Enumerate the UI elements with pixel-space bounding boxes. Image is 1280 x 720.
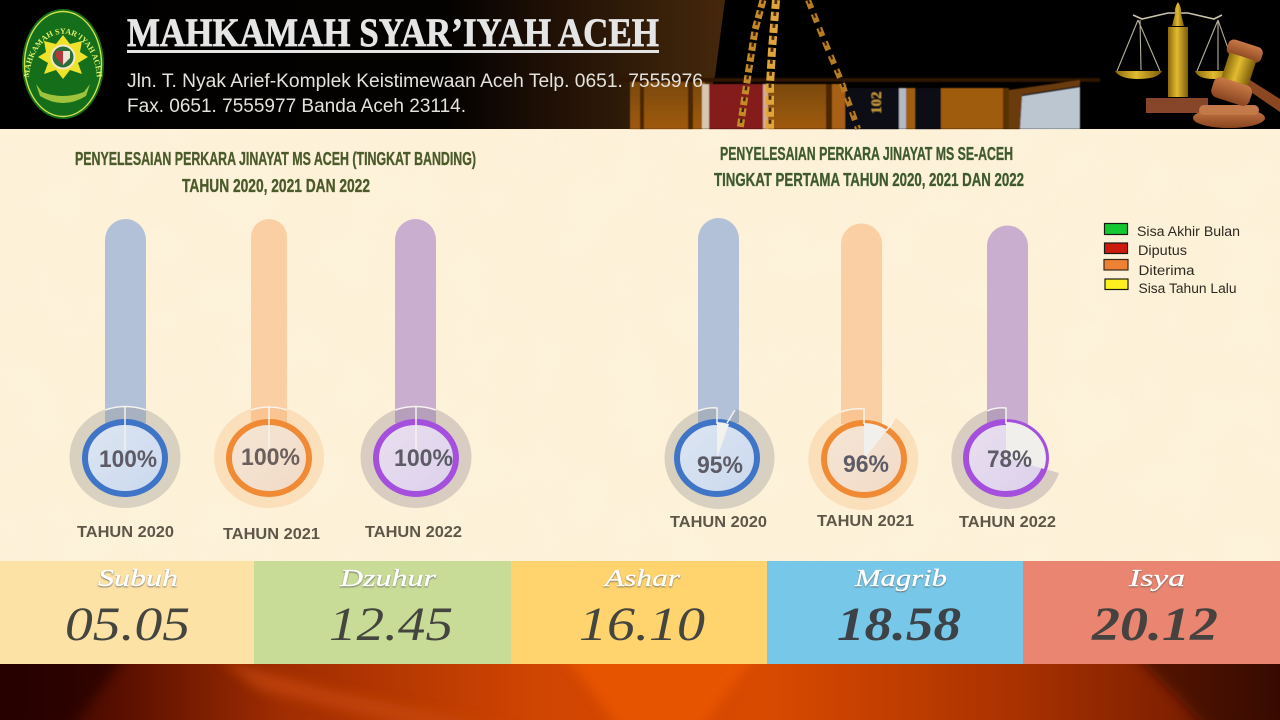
gauge: pertama 2022 78%: 78% — [987, 446, 1032, 473]
address: Fax. 0651. 7555977 Banda Aceh 23114. — [127, 96, 466, 117]
prayer times: magrib: Magrib — [854, 566, 947, 592]
gauge: banding 2020 100%: TAHUN 2020 — [77, 524, 174, 541]
prayer times: magrib — [767, 561, 1023, 664]
address — [127, 71, 703, 117]
prayer times: dzuhur: 12.45 — [329, 598, 453, 651]
legend: Sisa Tahun Lalu — [1138, 281, 1236, 296]
prayer times: ashar — [511, 561, 767, 664]
legend: Sisa Akhir Bulan — [1137, 224, 1240, 239]
icon: gavel — [1193, 37, 1280, 128]
heading: left chart: TAHUN 2020, 2021 DAN 2022 — [182, 176, 370, 196]
logo: court seal — [22, 9, 104, 119]
gauge: banding 2022 100% — [360, 219, 472, 541]
legend: Diterima — [1138, 263, 1195, 278]
prayer times: magrib: 18.58 — [837, 598, 961, 651]
prayer times: dzuhur: Dzuhur — [339, 566, 437, 592]
gauge: banding 2022 100%: TAHUN 2022 — [365, 524, 462, 541]
gauge: banding 2020 100% — [70, 219, 180, 541]
prayer times: isya: 20.12 — [1091, 598, 1218, 651]
logo: court seal: MAHKAMAH SYAR'IYAH ACEH — [24, 28, 102, 78]
header photo: law books — [620, 78, 1100, 129]
prayer times: isya: Isya — [1128, 566, 1185, 592]
prayer times: ashar: 16.10 — [579, 598, 705, 651]
legend — [1104, 224, 1240, 296]
prayer times: subuh: 05.05 — [65, 598, 190, 651]
heading: right chart: TINGKAT PERTAMA TAHUN 2020, 2021 DAN 2022 — [714, 170, 1024, 190]
title: MAHKAMAH SYAR’IYAH ACEH — [127, 10, 659, 55]
header photo: law books: 102 — [869, 92, 885, 114]
prayer times: subuh: Subuh — [98, 566, 178, 592]
header band — [0, 0, 1280, 129]
page background — [0, 129, 1280, 561]
heading: right chart: PENYELESAIAN PERKARA JINAYAT MS SE-ACEH — [720, 144, 1013, 164]
gauge: pertama 2022 78% — [951, 226, 1059, 531]
icon: scales and gavel — [1115, 2, 1280, 128]
gauge: pertama 2020 95%: TAHUN 2020 — [670, 514, 767, 531]
legend: Diputus — [1138, 243, 1187, 258]
heading: left chart — [75, 149, 476, 196]
gauge: pertama 2021 96% — [808, 223, 918, 530]
prayer times: subuh — [0, 561, 254, 664]
heading: left chart: PENYELESAIAN PERKARA JINAYAT MS ACEH (TINGKAT BANDING) — [75, 149, 476, 169]
gauge: banding 2021 100%: TAHUN 2021 — [223, 526, 320, 543]
gauge: pertama 2021 96%: 96% — [843, 451, 889, 478]
prayer times: ashar: Ashar — [602, 566, 681, 592]
gauge: pertama 2020 95% — [665, 218, 775, 531]
gauge: pertama 2022 78%: TAHUN 2022 — [959, 514, 1056, 531]
prayer times: isya — [1023, 561, 1280, 664]
footer band — [0, 664, 1280, 720]
heading: right chart — [714, 144, 1024, 190]
header photo: gold chains — [740, 0, 858, 129]
gauge: banding 2021 100% — [214, 219, 324, 543]
gauge: banding 2022 100%: 100% — [394, 445, 453, 472]
gauge: pertama 2020 95%: 95% — [697, 452, 743, 479]
icon: scales of justice — [1115, 2, 1236, 113]
gauge: pertama 2021 96%: TAHUN 2021 — [817, 513, 914, 530]
prayer times: dzuhur — [254, 561, 511, 664]
gauge: banding 2020 100%: 100% — [99, 446, 157, 473]
gauge: banding 2021 100%: 100% — [241, 444, 300, 471]
address: Jln. T. Nyak Arief-Komplek Keistimewaan Aceh Telp. 0651. 7555976 — [127, 71, 703, 92]
